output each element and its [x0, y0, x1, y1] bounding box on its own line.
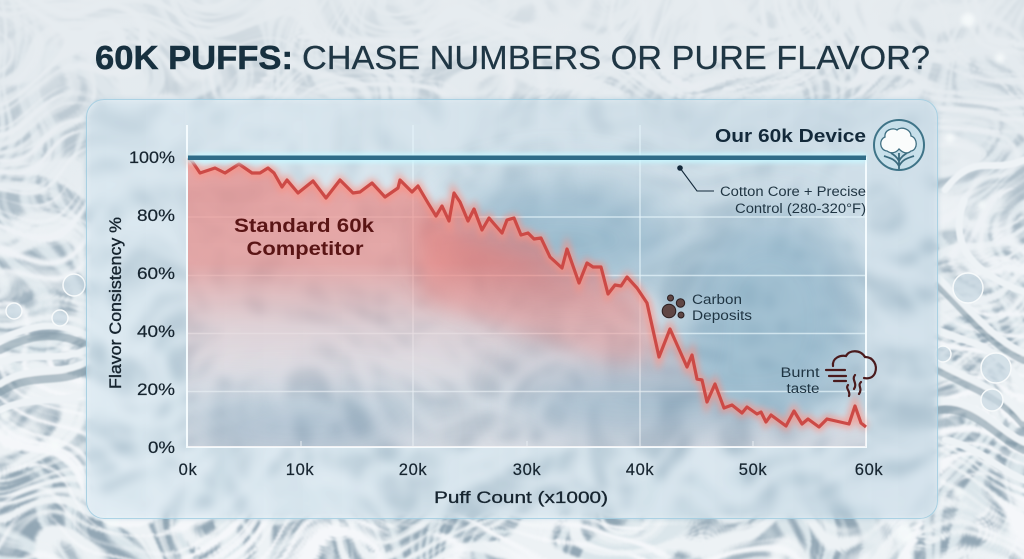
- glass bubbles: [6, 273, 1011, 411]
- label: our 60k device: Our 60k Device: [715, 126, 866, 146]
- callout: cotton core and precise control: Cotton Core + Precise: [720, 184, 866, 199]
- y axis tick labels: 40%: [137, 323, 175, 341]
- x axis tick labels: 0k: [179, 461, 197, 479]
- y axis tick labels: [129, 149, 175, 457]
- label: standard competitor: Competitor: [246, 238, 364, 260]
- competitor line: [188, 158, 866, 427]
- label: standard competitor: [234, 215, 374, 260]
- y axis tick labels: 100%: [129, 149, 175, 167]
- x axis tick labels: 20k: [399, 461, 427, 479]
- our device line: [188, 156, 866, 160]
- y axis tick labels: 20%: [137, 381, 175, 399]
- x axis tick labels: 30k: [513, 461, 541, 479]
- y axis line and x axis line: [187, 125, 866, 447]
- x axis tick labels: 50k: [739, 461, 767, 479]
- label: carbon deposits: [692, 292, 752, 323]
- icon: carbon deposits: [662, 295, 685, 318]
- label: burnt taste: [780, 365, 820, 396]
- x axis tick labels: 40k: [626, 461, 654, 479]
- chart: flavor consistency vs puff count: [107, 120, 924, 507]
- title: 60K PUFFS:: [95, 39, 293, 76]
- label: carbon deposits: Carbon: [692, 292, 742, 307]
- y axis title: Flavor Consistency %: [107, 217, 125, 389]
- label: burnt taste: Burnt: [780, 365, 820, 380]
- x axis tick labels: 10k: [286, 461, 314, 479]
- label: carbon deposits: Deposits: [692, 308, 752, 323]
- x axis tick labels: 60k: [855, 461, 883, 479]
- competitor line glow: [188, 158, 866, 427]
- y axis tick labels: 0%: [148, 439, 175, 457]
- label: standard competitor: Standard 60k: [234, 215, 374, 237]
- label: burnt taste: taste: [786, 381, 820, 396]
- title: CHASE NUMBERS OR PURE FLAVOR?: [302, 39, 930, 76]
- callout: cotton core and precise control: Control (280-320°F): [735, 201, 866, 216]
- y axis tick labels: 80%: [137, 207, 175, 225]
- pink band under steep decline: [420, 215, 655, 365]
- y axis tick labels: 60%: [137, 265, 175, 283]
- blue haze behind chart: [180, 180, 860, 460]
- device line glow: [187, 153, 866, 163]
- icon: burnt smoke cloud: [826, 351, 876, 396]
- x axis title: Puff Count (x1000): [434, 489, 608, 507]
- x axis tick labels: [179, 461, 883, 479]
- competitor area fill: [188, 158, 866, 447]
- callout: cotton core and precise control: [677, 165, 866, 216]
- icon: cotton plant: [874, 120, 924, 170]
- panel: glass chart card: [86, 99, 938, 519]
